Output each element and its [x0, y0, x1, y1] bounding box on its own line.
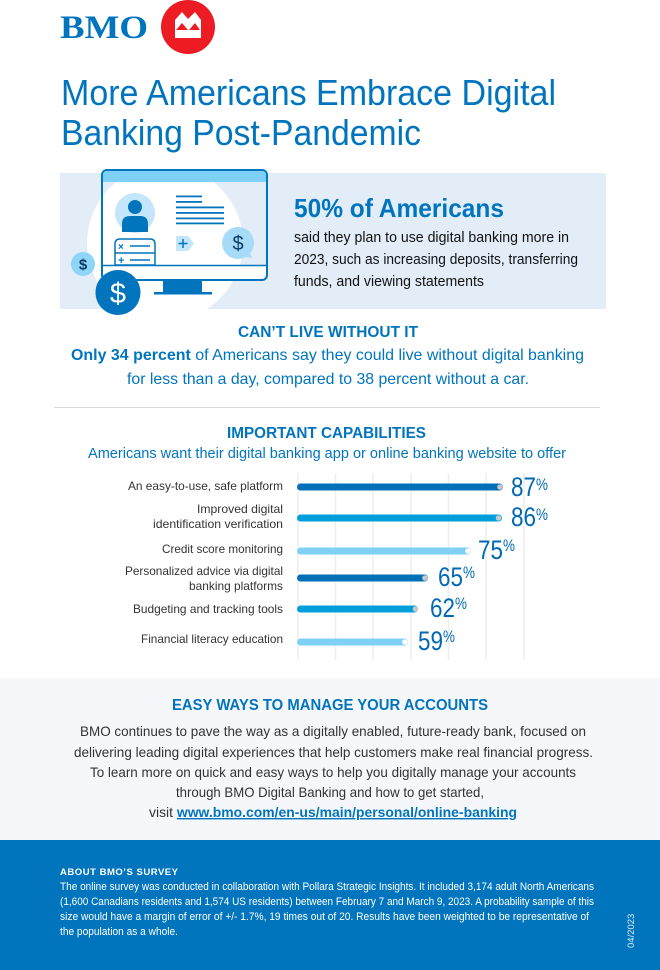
bar chart: % [536, 475, 548, 494]
icon: monitor with profile: $ [232, 233, 244, 255]
bar chart: banking platforms [189, 579, 283, 593]
stat text: said they plan to use digital banking more in [294, 230, 569, 246]
footer: about BMO's survey: 04/2023 [626, 914, 637, 948]
heading: important capabilities [88, 425, 566, 462]
panel: easy ways to manage: To learn more on quick and easy ways to help you digitally manage your accounts [90, 764, 576, 780]
footer: about BMO's survey: size would have a margin of error of +/- 1.7%, 19 times out of 20. Results have been weighted to be representative of [60, 911, 590, 923]
bar chart: 65 [438, 562, 463, 592]
heading: important capabilities: Americans want their digital banking app or online banking website to offer [88, 446, 566, 462]
bar chart: Financial literacy education [141, 632, 283, 646]
stat heading: 50% of Americans [294, 193, 504, 223]
bar chart: Improved digital [197, 502, 283, 516]
icon: monitor with profile [102, 170, 267, 294]
stat text: funds, and viewing statements [294, 274, 484, 290]
bar chart: % [455, 594, 467, 613]
bar chart: 87 [511, 472, 536, 502]
title [61, 72, 556, 153]
stat text: 2023, such as increasing deposits, transferring [294, 252, 578, 268]
footer: about BMO's survey: ABOUT BMO’S SURVEY [60, 867, 179, 878]
bar chart: 86 [511, 502, 536, 532]
icon: small dollar: $ [79, 256, 88, 274]
section: can't live without it: CAN’T LIVE WITHOUT IT [238, 324, 418, 341]
bar chart: % [463, 563, 475, 582]
panel: easy ways to manage: EASY WAYS TO MANAGE YOUR ACCOUNTS [172, 697, 488, 714]
stat text [294, 230, 578, 290]
bar chart: 75 [478, 535, 503, 565]
panel: easy ways to manage: BMO continues to pave the way as a digitally enabled, future-ready bank, focused on [80, 723, 586, 739]
section: can't live without it: Only 34 percent of Americans say they could live without digital banking [71, 347, 584, 364]
footer: about BMO's survey: the population as a whole. [60, 926, 178, 938]
title: Banking Post-Pandemic [61, 112, 421, 153]
bar chart: An easy-to-use, safe platform [128, 479, 283, 493]
section: can't live without it: for less than a day, compared to 38 percent without a car. [127, 371, 529, 388]
icon: monitor with profile: + [118, 255, 124, 267]
bar chart: Budgeting and tracking tools [133, 602, 283, 616]
bar chart: % [443, 627, 455, 646]
footer: about BMO's survey: (1,600 Canadians residents and 1,574 US residents) between February 7 and March 9, 2023. A probability sample of this [60, 896, 594, 908]
section: can't live without it [71, 324, 584, 388]
bar chart: % [536, 505, 548, 524]
bar chart: % [503, 536, 515, 555]
bar chart: identification verification [153, 517, 283, 531]
logo: BMO: BMO [60, 10, 148, 46]
bar chart: 59 [418, 626, 443, 656]
icon: small dollar [71, 252, 95, 276]
panel: 50% of Americans [60, 165, 606, 321]
footer: about BMO's survey [0, 840, 660, 970]
bar chart: Credit score monitoring [162, 542, 283, 556]
panel: easy ways to manage: through BMO Digital Banking and how to get started, [176, 784, 484, 800]
icon: monitor with profile: × [118, 242, 124, 253]
panel: easy ways to manage: delivering leading digital experiences that help customers make real financial progress. [74, 744, 593, 760]
footer: about BMO's survey: The online survey was conducted in collaboration with Pollara Strategic Insights. It included 3,174 adult North Americans [60, 881, 594, 893]
bar chart [125, 472, 548, 660]
icon: large dollar [96, 270, 140, 315]
bar chart: Personalized advice via digital [125, 564, 283, 578]
icon: large dollar: $ [110, 278, 126, 310]
bar chart: 62 [430, 593, 455, 623]
logo: BMO [60, 0, 215, 54]
heading: important capabilities: IMPORTANT CAPABILITIES [227, 425, 426, 442]
title: More Americans Embrace Digital [61, 72, 556, 113]
panel: easy ways to manage [0, 678, 660, 840]
panel: easy ways to manage: visit www.bmo.com/en-us/main/personal/online-banking [149, 804, 517, 820]
